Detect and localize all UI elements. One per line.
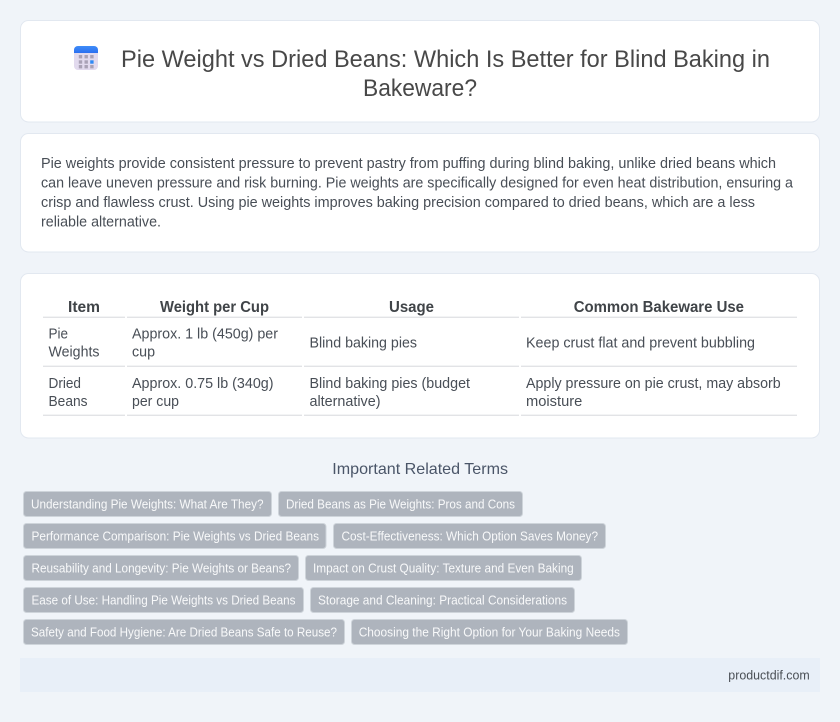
tag list: related terms: Choosing the Right Option for Your Baking Needs — [359, 624, 620, 639]
footer — [20, 658, 820, 692]
table row: dried beans: Dried — [48, 376, 81, 392]
panel: title header — [20, 20, 820, 122]
tag list: related terms — [24, 492, 628, 644]
table header row — [68, 299, 744, 316]
table row: dried beans — [48, 376, 781, 410]
text block: introduction paragraph: Pie weights provide consistent pressure to prevent pastry from puffing during blind baking, unlike dried beans which — [41, 156, 776, 172]
tag list: related terms: Understanding Pie Weights: What Are They? — [31, 496, 264, 511]
table row: dried beans: Blind baking pies (budget — [310, 376, 470, 392]
table header row: Weight per Cup — [160, 299, 269, 316]
table header row: Item — [68, 299, 100, 316]
table row: pie weights: Blind baking pies — [310, 336, 417, 352]
table header row: Common Bakeware Use — [574, 299, 744, 316]
table row: pie weights: Weights — [48, 345, 100, 361]
panel: comparison table — [20, 274, 820, 438]
tag list: related terms: Performance Comparison: Pie Weights vs Dried Beans — [32, 528, 319, 543]
icon: calendar — [74, 46, 98, 70]
tag list: related terms: Dried Beans as Pie Weights: Pros and Cons — [286, 496, 515, 511]
table row: dried beans: per cup — [132, 394, 179, 410]
table row: dried beans: Approx. 0.75 lb (340g) — [132, 376, 274, 392]
table row: pie weights: Keep crust flat and prevent bubbling — [526, 336, 755, 352]
table row: pie weights: cup — [132, 345, 155, 361]
text block: introduction paragraph — [41, 156, 793, 230]
table row: pie weights: Pie — [48, 327, 68, 343]
text block: introduction paragraph: reliable alternative. — [41, 214, 161, 230]
title: Pie Weight vs Dried Beans: Which Is Better for Blind Baking in — [121, 46, 770, 73]
footer: productdif.com — [728, 667, 810, 682]
table row: dried beans: alternative) — [310, 394, 380, 410]
table row: pie weights — [48, 327, 755, 361]
table row: dried beans: Apply pressure on pie crust, may absorb — [526, 376, 781, 392]
heading: important related terms: Important Related Terms — [332, 461, 508, 478]
tag list: related terms: Ease of Use: Handling Pie Weights vs Dried Beans — [32, 592, 296, 607]
tag list: related terms: Storage and Cleaning: Practical Considerations — [318, 592, 567, 607]
tag list: related terms: Reusability and Longevity: Pie Weights or Beans? — [32, 560, 291, 575]
tag list: related terms: Impact on Crust Quality: Texture and Even Baking — [313, 560, 574, 575]
text block: introduction paragraph: crisp and flawless crust. Using pie weights improves baking precision compared to dried beans, which are a less — [41, 195, 755, 211]
table header row: Usage — [389, 299, 434, 316]
table row: dried beans: Beans — [48, 394, 88, 410]
tag list: related terms: Cost-Effectiveness: Which Option Saves Money? — [342, 528, 598, 543]
title — [121, 46, 770, 102]
panel: introduction — [20, 134, 820, 252]
tag list: related terms: Safety and Food Hygiene: Are Dried Beans Safe to Reuse? — [31, 624, 337, 639]
text block: introduction paragraph: can leave uneven pressure and risk burning. Pie weights are specifically designed for even heat distribution, ensuring a — [41, 176, 793, 192]
table row: pie weights: Approx. 1 lb (450g) per — [132, 327, 278, 343]
table row: dried beans: moisture — [526, 394, 582, 410]
title: Bakeware? — [363, 75, 477, 102]
